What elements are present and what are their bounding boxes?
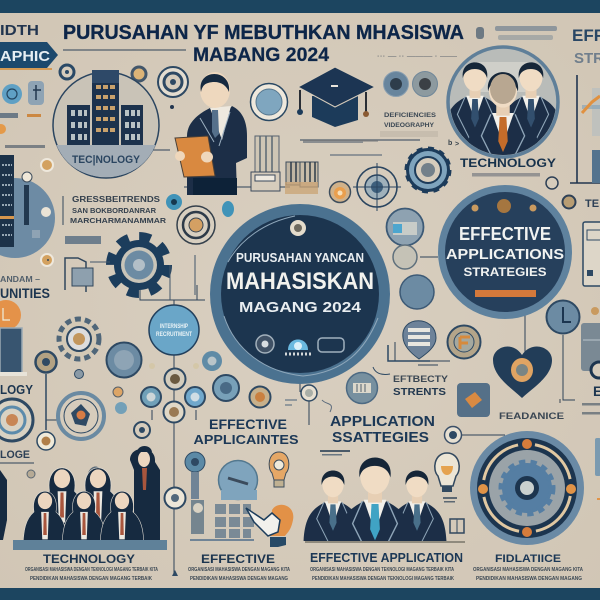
- label: application strategies: SSATTEGIES: [332, 430, 429, 446]
- label: effective, with caption: EFFECTIVE: [201, 552, 275, 566]
- icon: blue info circle: INTERNSHIP: [160, 324, 188, 330]
- small text: lines left of technology: [448, 140, 459, 148]
- person: man with clipboard: [175, 72, 247, 195]
- icon: blue info circle: [149, 305, 199, 355]
- label: technology, with caption: ORGANISASI MAHASISWA DENGAN TEKNOLOGI MAGANG TERBAIK KITA: [25, 567, 158, 573]
- label: fidlatice: ORGANISASI MAHASISWA DENGAN MAGANG KITA: [473, 567, 583, 573]
- title: [63, 21, 464, 66]
- icons: right of central circle: [386, 208, 434, 309]
- icon: right edge tablet and badge: [581, 307, 600, 500]
- label: technology, with caption: PENDIDIKAN MAHASISWA DENGAN MAGANG TERBAIK: [30, 576, 152, 582]
- title: PURUSAHAN YF MEBUTHKAN MHASISWA: [63, 21, 464, 44]
- small text: lines left of technology: >: [455, 141, 459, 148]
- panel: central title circle: MAHASISKAN: [226, 268, 374, 295]
- icons: upper left: [0, 81, 45, 148]
- icon: left concentric ring: [0, 399, 33, 441]
- icons: server columns: [251, 136, 318, 194]
- panel: strategy gear dial: [470, 431, 584, 545]
- panel: central title circle: PURUSAHAN YANCAN: [236, 250, 364, 265]
- panel: effective application strategies circle: EFFECTIVE: [459, 223, 551, 244]
- text block: centre left: [63, 195, 167, 225]
- icon: blue info circle: RECRUITMENT: [156, 332, 192, 338]
- label: opportunities: UNITIES: [0, 285, 50, 301]
- icons: paired portraits with caption: VIDEOGRAPHY: [384, 122, 435, 129]
- label: effective, with caption: [188, 552, 290, 582]
- label: technology, with caption: TECHNOLOGY: [43, 552, 135, 566]
- label: technology: [460, 156, 556, 176]
- label: application strategies: APPLICATION: [330, 413, 435, 430]
- icons: pin and orange ring: [388, 321, 480, 361]
- text fragment: top centre-right scribbles: [303, 26, 557, 156]
- label: effective, with caption: ORGANISASI MAHASISWA DENGAN MAGANG KITA: [188, 567, 290, 573]
- icons and label: right edge: [546, 177, 600, 286]
- label: technology fragment: LOGY: [0, 382, 33, 397]
- label: feadanice: [499, 399, 564, 422]
- label: feadanice: FEADANICE: [499, 411, 564, 422]
- small ring icons, top: [60, 65, 188, 109]
- text block: centre left: GRESSBEITRENDS: [72, 195, 161, 204]
- icon: gear: [112, 238, 166, 292]
- label: effective applications: [194, 417, 299, 447]
- label: effective application: PENDIDIKAN MAHASISWA DENGAN TEKNOLOGI MAGANG TERBAIK: [312, 576, 454, 582]
- top bar: [0, 0, 600, 13]
- label: technology fragment: [0, 382, 33, 461]
- icon: clock: [546, 300, 580, 334]
- icon: heart: [493, 347, 552, 398]
- icons: paired portraits with caption: DEFICIENCIES: [384, 112, 437, 119]
- panel: central title circle: MAGANG 2024: [239, 299, 362, 316]
- icons: teal badges and spiral ring: [166, 194, 234, 244]
- panel: company building circle: TEC|NOLOGY: [72, 154, 141, 166]
- icon: large compass ring: [58, 393, 104, 439]
- small text: lines left of technology: b: [448, 140, 452, 147]
- label: effective application: ORGANISASI MAHASISWA DENGAN TEKNOLOGI MAGANG TERBAIK KITA: [310, 567, 454, 573]
- icons: network nodes: [141, 363, 205, 576]
- icons: paired portraits with caption: [380, 72, 438, 137]
- icon: graduation cap: [297, 67, 375, 127]
- label: effect strents: [393, 374, 449, 398]
- panel: effective application strategies circle: APPLICATIONS: [446, 247, 564, 263]
- icon: glowing lamp ring: [330, 182, 350, 202]
- icon: hand pressing bulb: [246, 505, 293, 547]
- label: opportunities: ANDAM –: [0, 275, 41, 284]
- label: fidlatice: FIDLATIICE: [495, 553, 561, 565]
- icon: orange square tile: [457, 383, 490, 417]
- icon: small machine and label: [47, 236, 195, 300]
- icon cluster: gear and target: [406, 148, 450, 192]
- people: three smiling professionals: [304, 458, 465, 543]
- icons: small rings bottom left: [27, 422, 150, 478]
- text fragment: top centre-right scribbles: ··· — ·· ——— · ——: [377, 54, 457, 60]
- panel: effective application strategies circle: STRATEGIES: [464, 265, 546, 279]
- icons: ring with line: [301, 385, 462, 456]
- text block: centre left: MARCHARMANAMMAR: [70, 216, 167, 225]
- people group: technology team: [0, 446, 167, 550]
- icons: application tools: [185, 452, 258, 540]
- panel: left blue circle with dashboard: [0, 155, 55, 266]
- heading fragment: left edge: [0, 23, 58, 70]
- label: fidlatice: [473, 553, 583, 582]
- icons: left cluster: [36, 319, 142, 430]
- icon: lens ring: [250, 84, 288, 120]
- text block: centre left: SAN BOKBORDANRAR: [72, 206, 157, 215]
- label: technology, with caption: [25, 552, 158, 582]
- heading fragment: left edge: IDTH: [0, 23, 39, 39]
- icon: idea bulb: [435, 453, 464, 533]
- label: opportunities: [0, 275, 50, 301]
- heading fragment: left edge: APHIC: [0, 48, 50, 65]
- label: technology: TECHNOLOGY: [460, 156, 556, 170]
- label: application strategies: [330, 413, 435, 446]
- icon: light bulb: [269, 452, 289, 487]
- icons and label: right edge: TE: [585, 198, 599, 210]
- label: effective application: EFFECTIVE APPLICATION: [310, 551, 463, 565]
- icons: row right of network: [202, 351, 297, 408]
- label: right edge fragment with caption: [582, 383, 600, 414]
- label: effective applications: EFFECTIVE: [209, 417, 287, 432]
- label: effective applications: APPLICAINTES: [194, 432, 299, 447]
- label: effective application: [310, 551, 463, 582]
- panel: effective application strategies circle: [438, 185, 572, 319]
- label: effective, with caption: PENDIDIKAN MAHASISWA DENGAN MAGANG: [190, 576, 288, 582]
- heading fragment: top right: [572, 26, 600, 67]
- label: fidlatice: PENDIDIKAN MAHASISWA DENGAN MAGANG: [476, 576, 582, 582]
- label: effect strents: EFTBECTY: [393, 374, 449, 385]
- panel: company building circle: [53, 70, 159, 178]
- icon: target ring: [353, 163, 401, 211]
- title: MABANG 2024: [193, 45, 329, 66]
- panel: three executives circle: [446, 45, 560, 159]
- icon: dial: [346, 367, 390, 404]
- chart: line and bars: [570, 75, 600, 183]
- label: technology fragment: LOGE: [0, 449, 30, 461]
- bottom bar: [0, 588, 600, 600]
- panel: central title circle: [210, 204, 390, 384]
- icon: orange badge and laptop: [0, 300, 27, 376]
- label: effect strents: STRENTS: [393, 387, 446, 398]
